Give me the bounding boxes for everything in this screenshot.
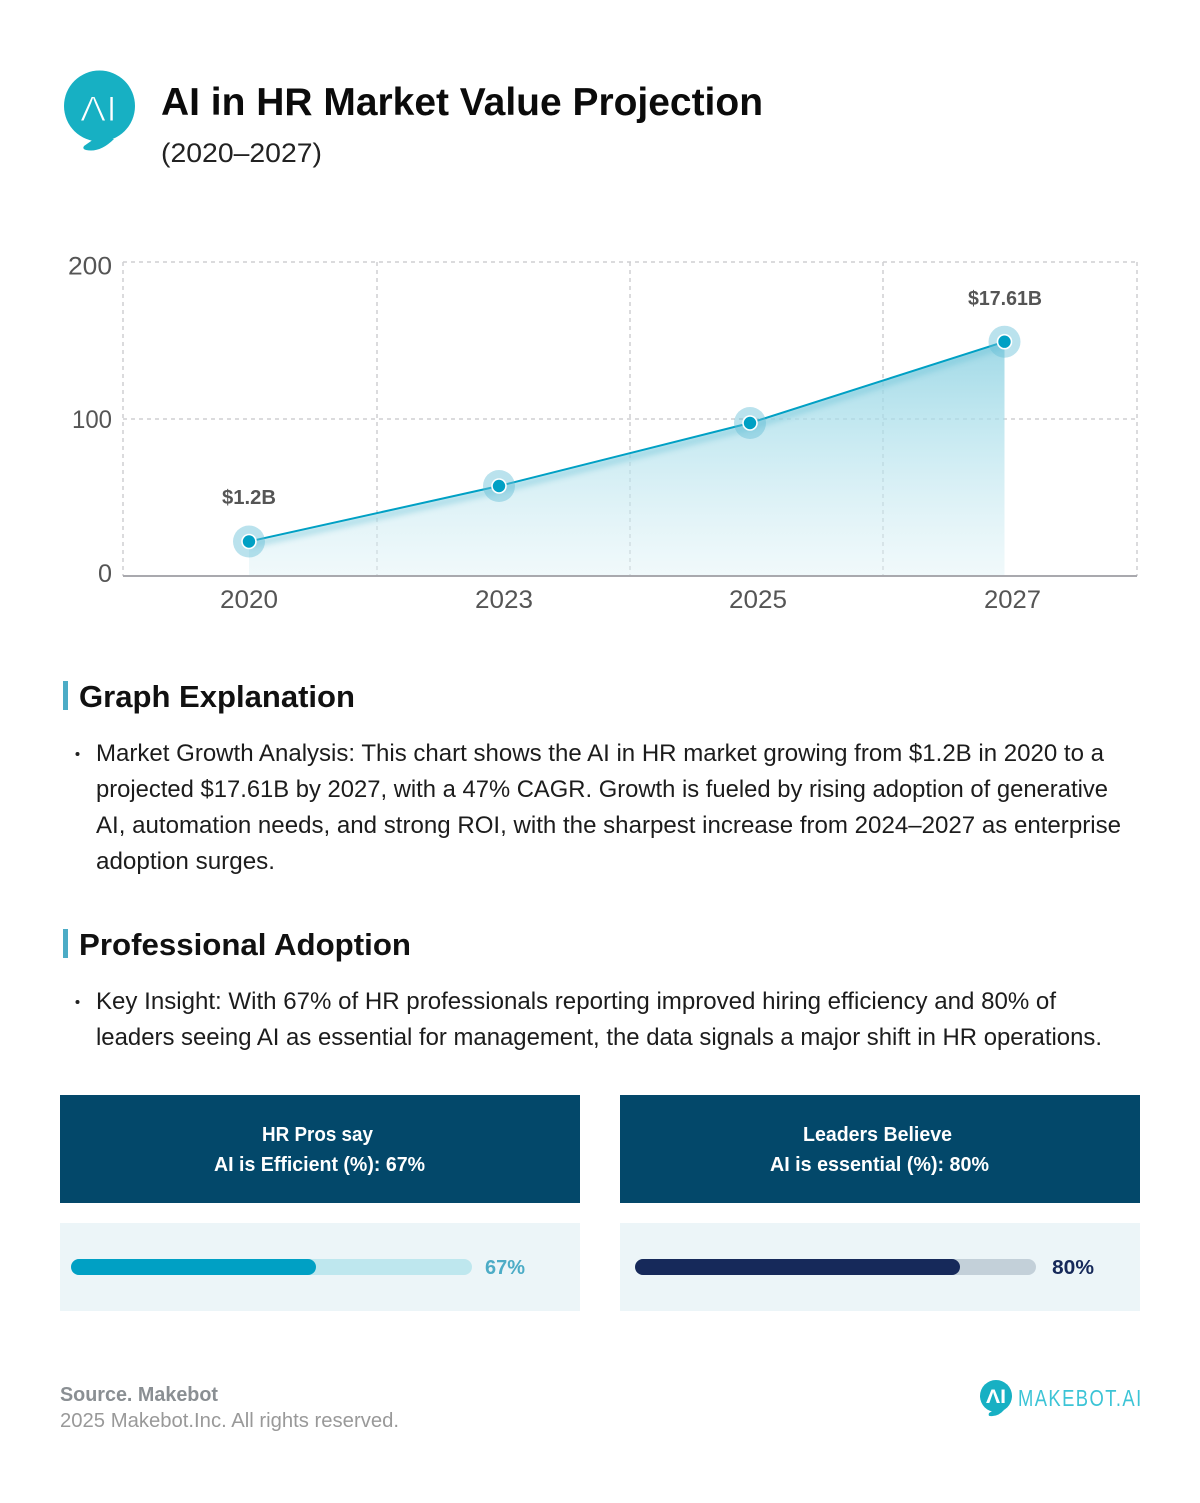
logo wordmark: MAKEBOT.AI xyxy=(1018,1386,1141,1412)
y-axis labels xyxy=(68,252,112,588)
heading: Graph Explanation xyxy=(79,679,355,714)
icon: AI speech bubble: ΛI xyxy=(80,90,117,129)
progress panel xyxy=(620,1223,1140,1311)
body text: Key Insight: With 67% of HR professionals reporting improved hiring efficiency and 80% of xyxy=(96,988,1056,1015)
heading accent bar xyxy=(63,681,68,710)
section: graph explanation xyxy=(63,679,1121,875)
x-axis labels: 2020 xyxy=(220,586,278,614)
x-axis labels: 2025 xyxy=(729,586,787,614)
area line chart xyxy=(68,252,1137,614)
card header xyxy=(60,1095,580,1203)
bullet xyxy=(76,1000,80,1004)
data point 2023 xyxy=(483,470,515,502)
card: leaders xyxy=(620,1095,1140,1311)
body text: Market Growth Analysis: This chart shows the AI in HR market growing from $1.2B in 2020 to a xyxy=(96,740,1105,767)
body text: leaders seeing AI as essential for management, the data signals a major shift in HR operations. xyxy=(96,1024,1102,1051)
data point 2027 xyxy=(988,326,1020,358)
x-axis labels: 2023 xyxy=(475,586,533,614)
progress panel: 80% xyxy=(1052,1257,1094,1279)
heading: Professional Adoption xyxy=(79,927,411,962)
heading accent bar xyxy=(63,929,68,958)
card header: AI is Efficient (%): 67% xyxy=(214,1154,425,1176)
y-axis labels: 0 xyxy=(98,560,112,588)
card header: Leaders Believe xyxy=(803,1124,952,1146)
x-axis labels xyxy=(220,586,1041,614)
x-axis labels: 2027 xyxy=(984,586,1041,614)
x-axis baseline xyxy=(123,575,1137,577)
subtitle: (2020–2027) xyxy=(161,138,322,168)
title: AI in HR Market Value Projection xyxy=(161,81,763,124)
data point 2025 xyxy=(734,407,766,439)
data point 2020 xyxy=(233,526,265,558)
y-axis labels: 200 xyxy=(68,252,112,280)
section: professional adoption xyxy=(63,927,1102,1051)
icon: AI speech bubble xyxy=(64,70,135,151)
card header: HR Pros say xyxy=(262,1124,374,1146)
footer logo xyxy=(980,1380,1141,1416)
body text: adoption surges. xyxy=(96,848,275,875)
footer source: 2025 Makebot.Inc. All rights reserved. xyxy=(60,1410,399,1432)
card header: AI is essential (%): 80% xyxy=(770,1154,989,1176)
logo bubble: ΛI xyxy=(986,1387,1006,1408)
card: HR pros xyxy=(60,1095,580,1311)
body text: AI, automation needs, and strong ROI, with the sharpest increase from 2024–2027 as enterprise xyxy=(96,812,1121,839)
logo bubble xyxy=(980,1380,1012,1416)
body text: projected $17.61B by 2027, with a 47% CAGR. Growth is fueled by rising adoption of generative xyxy=(96,776,1108,803)
body text xyxy=(96,988,1102,1051)
header xyxy=(64,70,763,168)
progress panel: 67% xyxy=(485,1257,525,1279)
shaded area under line xyxy=(249,342,1004,576)
y-axis labels: 100 xyxy=(72,406,112,434)
data line xyxy=(249,342,1004,542)
bullet xyxy=(76,752,80,756)
progress panel xyxy=(60,1223,580,1311)
body text xyxy=(96,740,1121,875)
chart grid xyxy=(123,262,1137,576)
footer source xyxy=(60,1384,399,1432)
footer source: Source. Makebot xyxy=(60,1384,218,1406)
card header xyxy=(620,1095,1140,1203)
value label 2027: $17.61B xyxy=(968,288,1042,310)
value label 2020: $1.2B xyxy=(222,487,276,509)
